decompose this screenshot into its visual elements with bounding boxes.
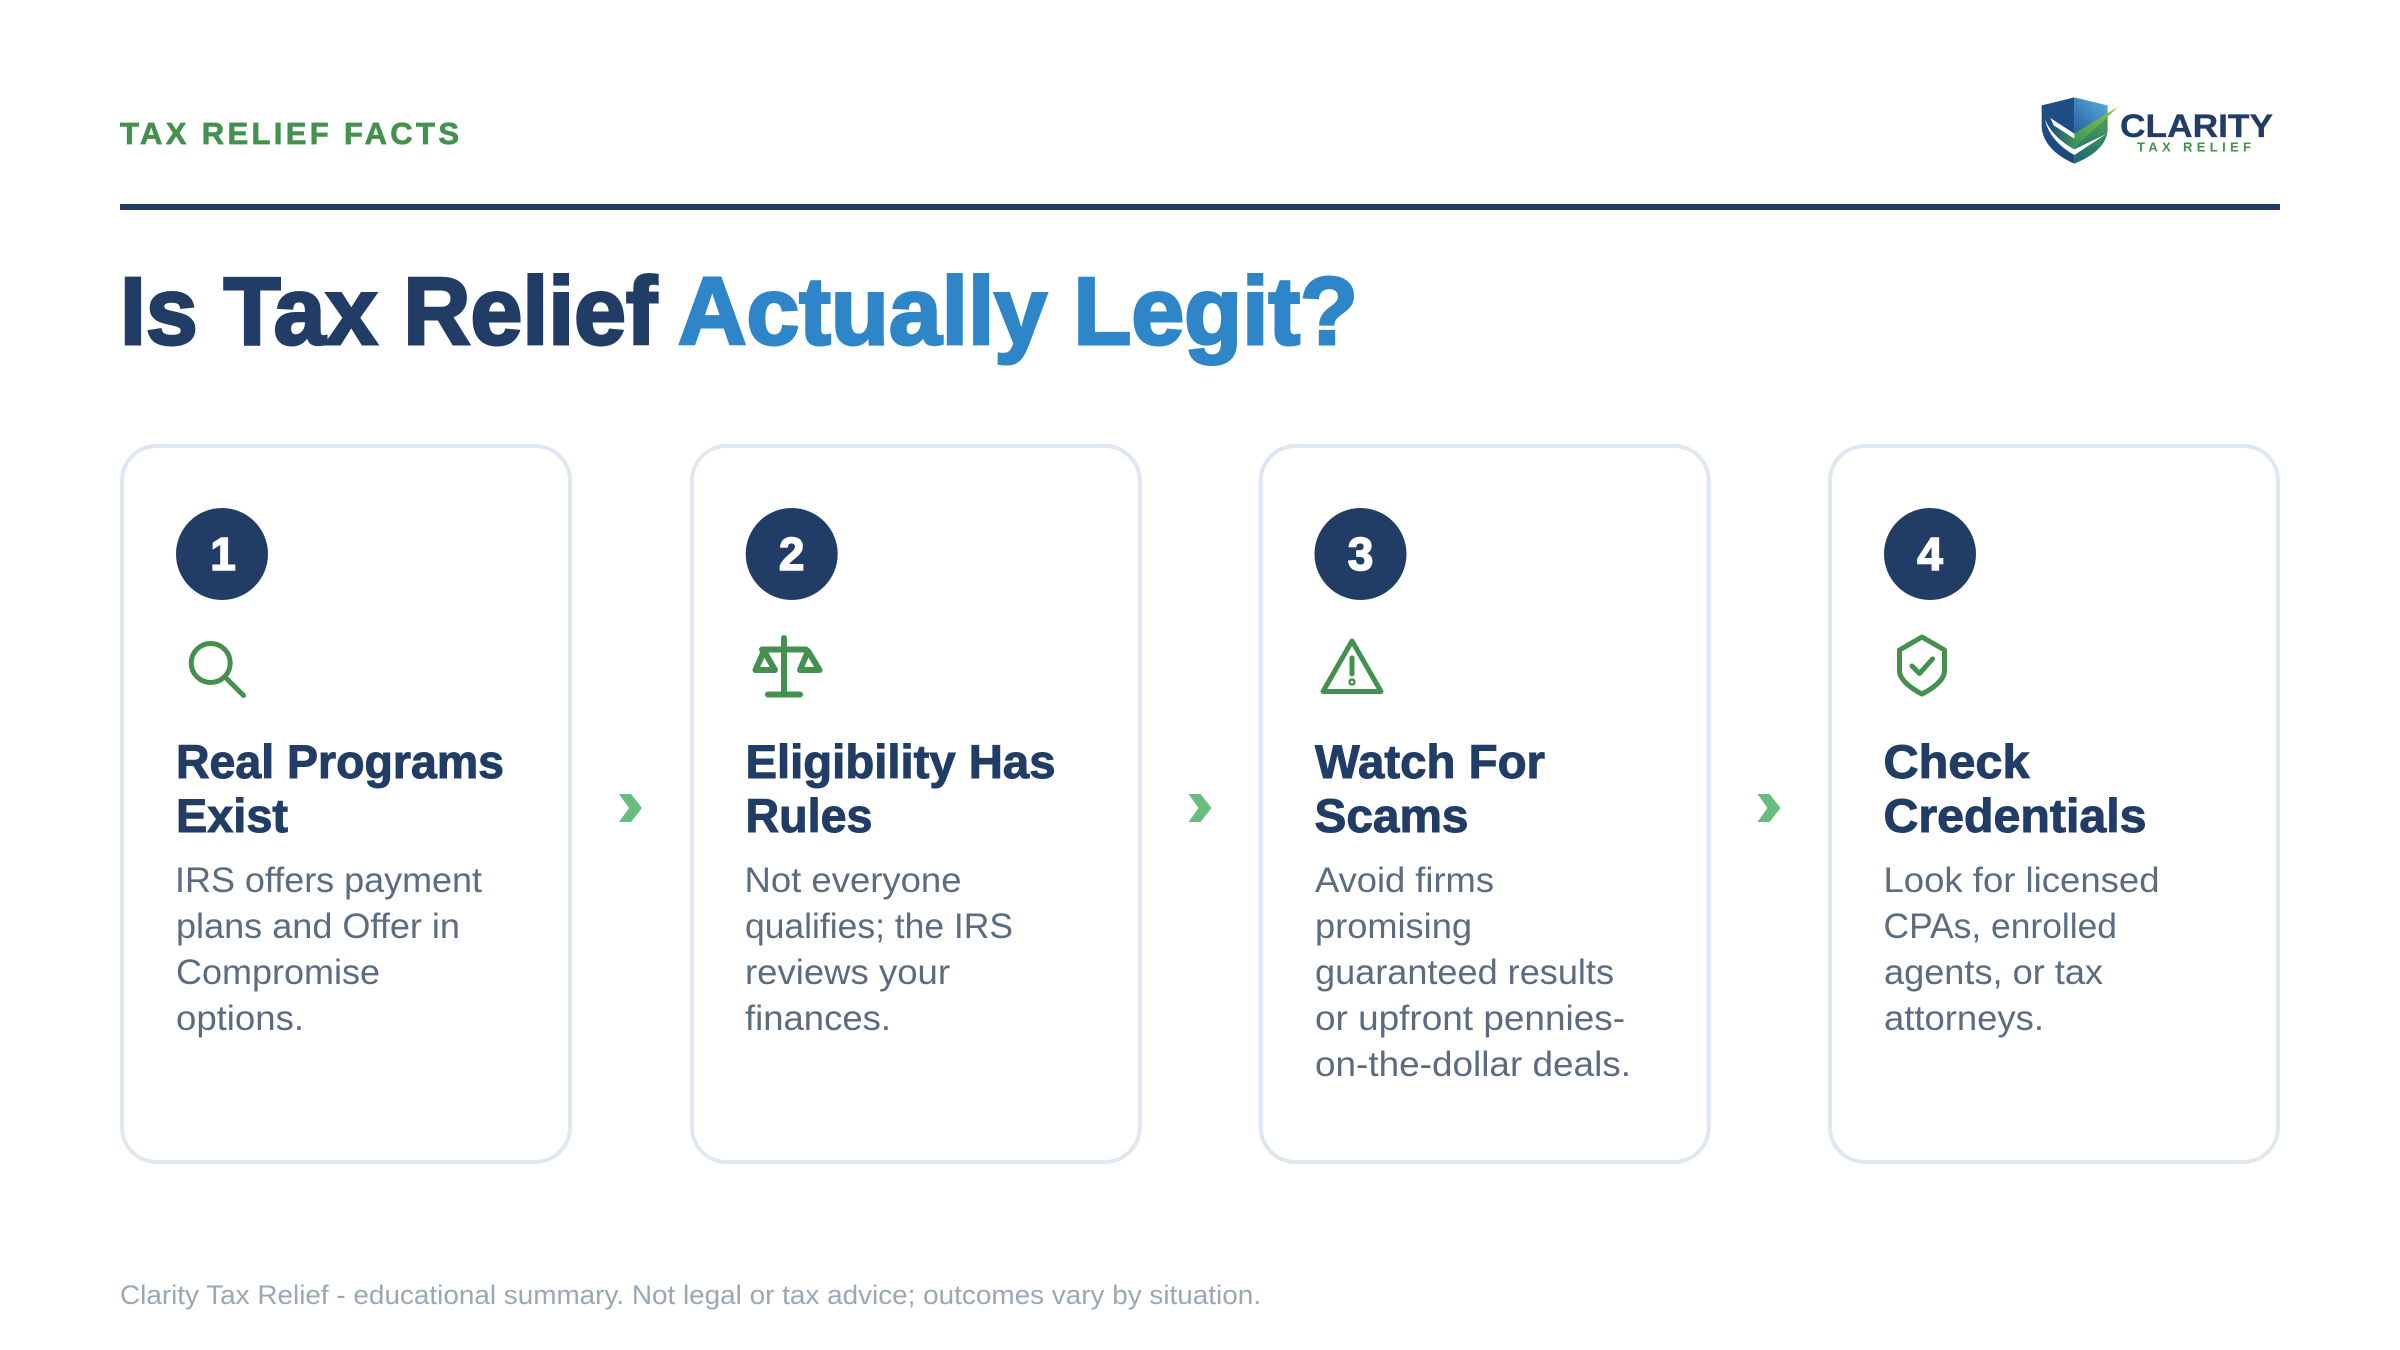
logo: Clarity Tax Relief <box>2042 97 2273 164</box>
body text: finances. <box>745 999 891 1038</box>
step number badge 1: 1 <box>210 528 236 580</box>
panel: step 2 eligibility has rules <box>692 446 1140 1162</box>
heading: Scams <box>1314 789 1468 842</box>
icon: shield check <box>1900 637 1944 694</box>
heading <box>1314 735 1545 842</box>
body text: CPAs, enrolled <box>1884 907 2117 946</box>
heading: Exist <box>176 789 288 842</box>
body text: IRS offers payment <box>175 861 482 900</box>
step number badge 1 <box>176 508 268 600</box>
body text: or upfront pennies- <box>1315 999 1625 1038</box>
body text <box>1315 861 1631 1084</box>
step number badge 2 <box>746 508 838 600</box>
panel: step 1 real programs exist <box>122 446 570 1162</box>
body text: Compromise <box>176 953 380 992</box>
step number badge 4 <box>1884 508 1976 600</box>
heading: Check <box>1884 735 2030 788</box>
arrow 3 <box>1758 794 1780 822</box>
body text: Not everyone <box>744 861 962 900</box>
heading: Credentials <box>1884 789 2146 842</box>
body text: Avoid firms <box>1315 861 1494 900</box>
body text: options. <box>176 999 304 1038</box>
title <box>120 258 1358 365</box>
body text: promising <box>1315 907 1472 946</box>
body text: Look for licensed <box>1884 861 2160 900</box>
icon: warning triangle <box>1323 641 1381 692</box>
body text: attorneys. <box>1884 999 2044 1038</box>
panel: step 3 watch for scams <box>1261 446 1709 1162</box>
body text: qualifies; the IRS <box>745 907 1013 946</box>
body text: on-the-dollar deals. <box>1315 1045 1631 1084</box>
heading: Eligibility Has <box>746 735 1056 788</box>
step number badge 3 <box>1314 508 1406 600</box>
title: Actually Legit? <box>678 258 1358 365</box>
step number badge 4: 4 <box>1917 528 1943 580</box>
body text: plans and Offer in <box>176 907 460 946</box>
heading: Real Programs <box>176 735 504 788</box>
icon: logo shield <box>2042 97 2118 164</box>
panel: step 4 check credentials <box>1830 446 2278 1162</box>
step number badge 3: 3 <box>1348 528 1373 580</box>
footer disclaimer: Clarity Tax Relief - educational summary. Not legal or tax advice; outcomes vary by situation. <box>120 1280 1261 1310</box>
step number badge 2: 2 <box>779 528 804 580</box>
icon: balance scales <box>756 638 820 694</box>
arrow 1 <box>619 794 642 822</box>
body text: agents, or tax <box>1884 953 2104 992</box>
logo: Clarity Tax Relief: CLARITY <box>2120 108 2273 144</box>
heading <box>1884 735 2146 842</box>
body text <box>175 861 482 1038</box>
heading <box>746 735 1056 842</box>
title: Is Tax Relief <box>120 258 658 365</box>
body text <box>744 861 1013 1038</box>
heading: Watch For <box>1315 735 1545 788</box>
body text: reviews your <box>745 953 950 992</box>
icon: magnifying glass <box>191 644 244 696</box>
body text: guaranteed results <box>1315 953 1614 992</box>
heading: Rules <box>746 789 872 842</box>
logo: Clarity Tax Relief: TAX RELIEF <box>2137 140 2251 155</box>
arrow 2 <box>1188 794 1212 822</box>
eyebrow label: TAX RELIEF FACTS <box>120 116 459 151</box>
body text <box>1884 861 2160 1038</box>
heading <box>176 735 504 842</box>
